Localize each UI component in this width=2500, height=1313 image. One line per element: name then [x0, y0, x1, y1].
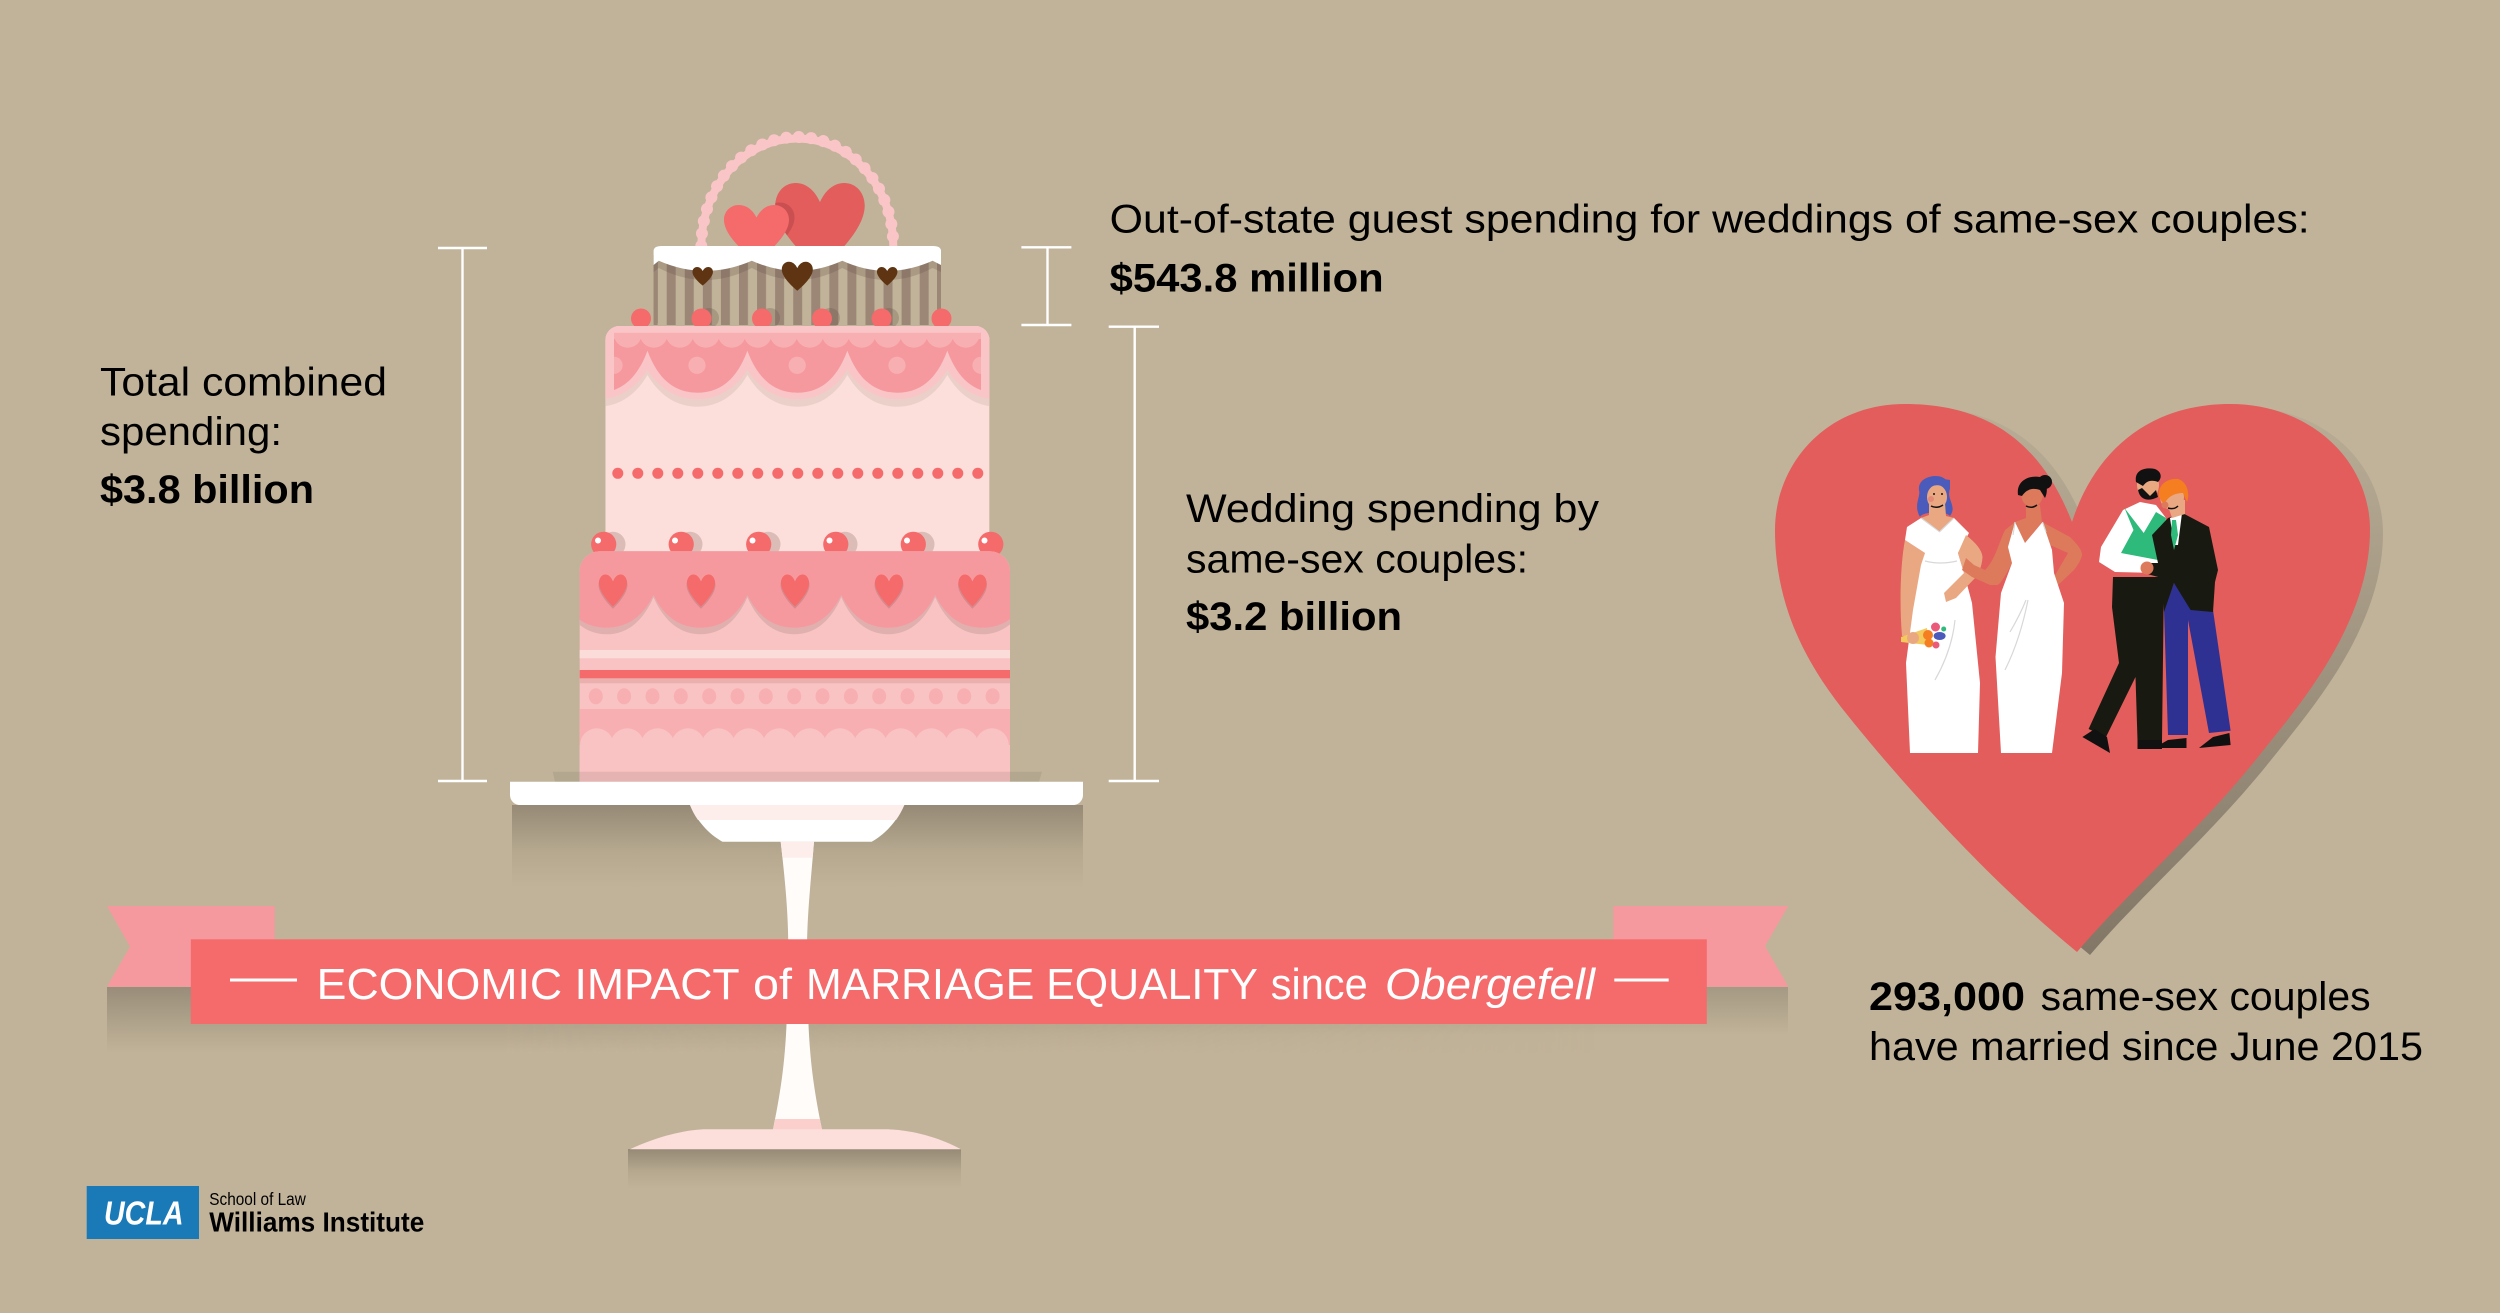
lower cherries	[591, 532, 1003, 557]
title dashes	[230, 978, 1669, 982]
text: total combined spending: Total combined	[100, 361, 387, 405]
text: 293,000 couples: have married since June 2015	[1869, 1025, 2423, 1069]
middle tier	[605, 326, 990, 552]
cake stand	[510, 782, 1083, 1149]
text: 293,000 couples: 293,000	[1869, 975, 2025, 1019]
cake topper	[701, 137, 893, 270]
bride with dark hair	[1962, 475, 2082, 753]
UCLA Williams Institute logo: UCLA	[104, 1194, 184, 1231]
title text	[317, 960, 1596, 1009]
title text: of	[753, 960, 793, 1009]
title text: ECONOMIC IMPACT	[317, 960, 740, 1009]
cake base shadow	[553, 772, 1042, 782]
text: wedding spending by couples	[1186, 487, 1599, 639]
UCLA Williams Institute logo: Williams Institute	[209, 1207, 424, 1238]
plate	[510, 782, 1083, 805]
bottom tier	[560, 551, 1029, 782]
bracket: couples spending	[1109, 327, 1159, 781]
text: 293,000 couples	[1869, 975, 2423, 1069]
text: wedding spending by couples: $3.2 billion	[1186, 595, 1402, 639]
stem	[781, 842, 814, 945]
UCLA box	[87, 1186, 199, 1239]
text: out-of-state guest spending: $543.8 million	[1110, 257, 1384, 301]
row of red dots	[612, 468, 983, 479]
text: wedding spending by couples: Wedding spending by	[1186, 487, 1599, 531]
groom in black jacket	[2140, 479, 2231, 748]
text: total combined spending: $3.8 billion	[100, 468, 314, 512]
text: 293,000 couples: same-sex couples	[2041, 975, 2371, 1019]
foot shadow	[628, 1149, 961, 1189]
foot	[630, 1129, 961, 1149]
heart shadow	[1788, 407, 2383, 955]
bracket: total spending	[438, 248, 487, 781]
title text: Obergefell	[1385, 960, 1596, 1009]
title text: since	[1271, 960, 1368, 1009]
text: total combined spending	[100, 361, 387, 512]
bowl	[690, 805, 904, 842]
heart with couples	[1775, 404, 2383, 955]
title banner	[191, 939, 1707, 1024]
heart	[1775, 404, 2370, 952]
UCLA Williams Institute logo	[87, 1186, 424, 1239]
UCLA Williams Institute logo: School of Law	[209, 1189, 306, 1209]
text: out-of-state guest spending: Out-of-state guest spending for weddings of same-sex couples:	[1110, 197, 2310, 241]
top tier	[631, 246, 952, 328]
bouquet	[1901, 622, 1946, 648]
bride with blue hair	[1901, 476, 1982, 753]
text: wedding spending by couples: same-sex couples:	[1186, 538, 1528, 582]
bracket: guest spending	[1021, 247, 1071, 325]
cake stand shadow	[512, 805, 1083, 888]
text: total combined spending: spending:	[100, 410, 282, 454]
groom in green vest	[2082, 468, 2166, 753]
ribbon tails	[107, 906, 1788, 987]
banner shadow	[107, 987, 1788, 1038]
wedding cake	[510, 137, 1083, 1149]
topper hearts	[724, 183, 865, 246]
title text: MARRIAGE EQUALITY	[806, 960, 1258, 1009]
topper arch	[701, 137, 893, 246]
text: out-of-state guest spending	[1110, 197, 2310, 301]
